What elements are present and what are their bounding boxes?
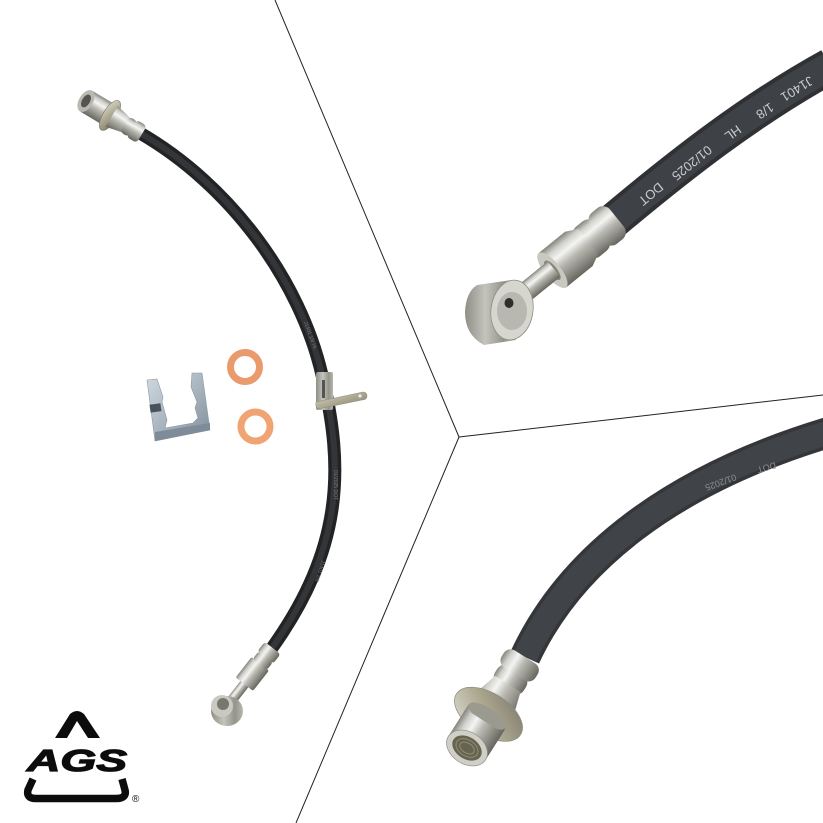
hose print: left bbox=[302, 321, 338, 582]
copper washer: top bbox=[230, 352, 260, 382]
hose print: close-up top: J1401 bbox=[778, 73, 816, 105]
fitting: banjo eye bbox=[465, 277, 537, 345]
logo wordmark: AGS bbox=[26, 743, 127, 778]
hose print: close-up bottom: 01/2025 bbox=[704, 472, 738, 493]
hose print: close-up top: 01/2025 bbox=[669, 142, 715, 184]
registered mark: ® bbox=[132, 794, 140, 805]
hose: full length bbox=[140, 133, 335, 648]
hose print: close-up bottom: DOT bbox=[756, 460, 777, 475]
fitting: banjo end bbox=[211, 641, 281, 726]
logo chevron bbox=[55, 711, 100, 738]
logo: AGS bbox=[26, 711, 140, 805]
panel: threaded fitting close-up bbox=[426, 432, 823, 782]
logo base bracket bbox=[28, 779, 125, 798]
hose: close-up bottom bbox=[525, 432, 823, 657]
retaining clip bbox=[147, 373, 210, 441]
panel: full hose assembly bbox=[71, 83, 367, 726]
panel: banjo fitting close-up bbox=[465, 66, 823, 345]
fitting: crimp and tube bbox=[512, 201, 631, 309]
fitting: top end bbox=[71, 83, 150, 149]
divider lines between panels bbox=[275, 0, 823, 823]
hose: close-up top bbox=[612, 66, 823, 222]
panel: accessory parts bbox=[147, 352, 270, 441]
hose print: left: J1401 1/8 HL bbox=[302, 321, 318, 351]
hose print: close-up bottom bbox=[704, 460, 777, 493]
copper washer: bottom bbox=[241, 412, 270, 441]
fitting: mid bracket bbox=[316, 372, 367, 410]
hose print: close-up top: HL bbox=[722, 122, 744, 144]
hose print: close-up top: 1/8 bbox=[753, 100, 777, 122]
hose print: close-up top: DOT bbox=[636, 179, 666, 209]
hose print: left: 01/2025 DOT bbox=[332, 470, 338, 500]
hose print: left: J1401 1/8 bbox=[313, 559, 326, 582]
fitting: threaded end bbox=[426, 636, 557, 782]
hose print: close-up top bbox=[636, 73, 816, 209]
